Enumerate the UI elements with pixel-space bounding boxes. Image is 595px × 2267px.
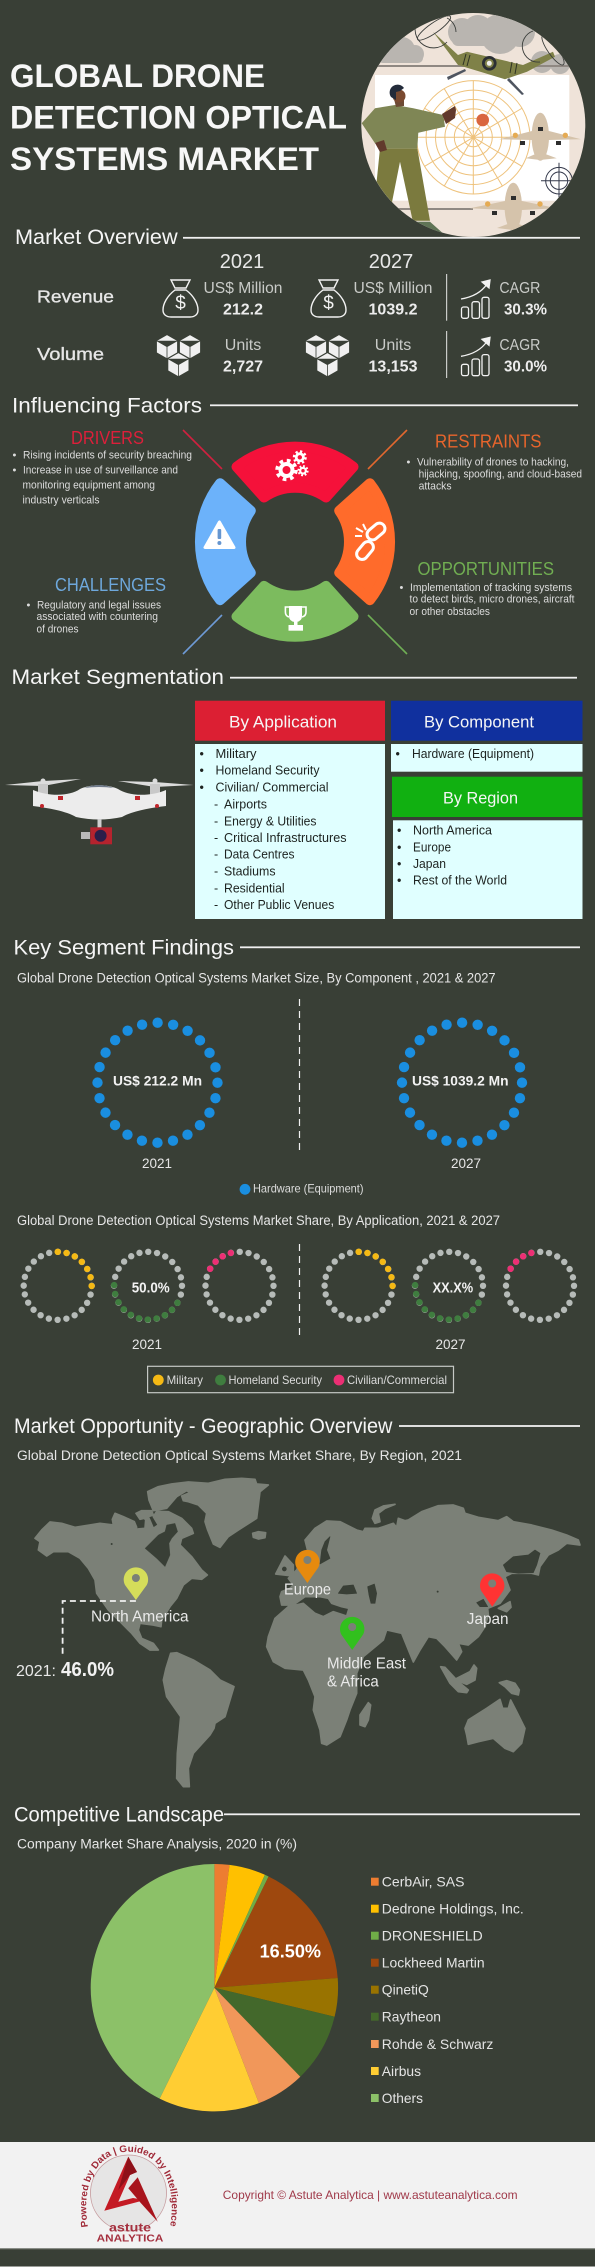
volume values: 13,153 <box>369 359 418 376</box>
row labels: Volume <box>37 344 104 364</box>
pin: middle east and africa <box>340 1617 364 1650</box>
crosshair <box>541 162 572 198</box>
list: - <box>214 848 218 862</box>
year labels: 2027 <box>451 1156 481 1171</box>
icon: gears <box>277 452 308 480</box>
legend: Military <box>167 1373 203 1387</box>
list: • <box>396 747 400 761</box>
row labels: Revenue <box>37 287 114 307</box>
logo: astute analytica: astute <box>109 2221 151 2235</box>
ring values: 50.0% <box>132 1280 170 1296</box>
icon: money bag 2027 <box>311 280 346 317</box>
year labels: 2021 <box>220 251 264 273</box>
footer band <box>0 2142 595 2250</box>
restraints text: hijacking, spoofing, and cloud-based <box>419 468 582 480</box>
list: • <box>397 857 401 871</box>
CAGR values: 30.3% <box>504 302 547 318</box>
icon: warning <box>205 522 234 548</box>
drivers text: • <box>12 464 16 476</box>
heading: influencing factors: Influencing Factors <box>12 394 202 417</box>
drivers text: monitoring equipment among <box>22 479 155 491</box>
header <box>392 777 582 817</box>
header: By Component <box>424 712 534 731</box>
ring 2027 <box>402 1023 522 1143</box>
world map <box>35 1478 580 1787</box>
CAGR values: CAGR <box>499 280 540 297</box>
coloured share dots <box>58 1252 540 1320</box>
aircraft lower <box>470 183 557 231</box>
list: Other Public Venues <box>224 898 334 912</box>
opportunities text: to detect birds, micro drones, aircraft <box>410 594 574 606</box>
list <box>195 744 385 919</box>
pie chart: company market share <box>91 1864 338 2111</box>
opportunities text: or other obstacles <box>410 606 490 618</box>
pie legend <box>371 1874 524 2106</box>
title: GLOBAL DRONE <box>10 58 265 94</box>
list: Civilian/ Commercial <box>216 781 328 795</box>
segment: challenges <box>200 483 251 600</box>
drivers text: DRIVERS <box>71 427 144 448</box>
panel: market overview table <box>37 251 547 378</box>
opportunities text: Implementation of tracking systems <box>410 582 572 594</box>
year labels <box>220 251 413 273</box>
header: By Region <box>443 788 518 807</box>
row labels <box>37 287 114 364</box>
restraints text: attacks <box>419 480 452 492</box>
ring 2027: US$ 1039.2 Mn <box>412 1072 508 1088</box>
pie chart: company market share: 16.50% <box>260 1941 321 1961</box>
connector lines <box>183 430 407 654</box>
pie legend: DRONESHIELD <box>382 1928 483 1944</box>
region labels: Japan <box>467 1611 508 1628</box>
subtitle: market share by application: Global Drone Detection Optical Systems Market Share, By Application, 2021 & 2027 <box>17 1213 500 1228</box>
region labels: North America <box>91 1609 189 1626</box>
year labels: 2021 <box>142 1156 172 1171</box>
challenges text: CHALLENGES <box>55 574 166 595</box>
legend <box>148 1366 454 1393</box>
list: Military <box>216 747 257 761</box>
legend: Hardware (Equipment) <box>253 1182 364 1196</box>
pie legend: CerbAir, SAS <box>382 1874 464 1890</box>
logo: astute analytica: ANALYTICA <box>97 2233 164 2245</box>
pie legend: QinetiQ <box>382 1982 429 1998</box>
header <box>195 701 385 741</box>
ring 2021 <box>98 1023 218 1143</box>
legend: Homeland Security <box>228 1373 322 1387</box>
region labels: Middle East <box>327 1655 407 1672</box>
list: Data Centres <box>224 848 294 862</box>
icon: growth chart revenue <box>461 280 490 318</box>
drivers text <box>12 427 192 506</box>
revenue values: 212.2 <box>223 301 263 318</box>
restraints text: Vulnerability of drones to hacking, <box>417 456 569 468</box>
legend: Civilian/Commercial <box>347 1373 447 1387</box>
heading: geographic overview: Market Opportunity - Geographic Overview <box>14 1415 393 1438</box>
pie legend: Lockheed Martin <box>382 1955 485 1971</box>
aircraft upper <box>499 113 581 161</box>
list: Japan <box>413 857 446 871</box>
heading: key segment findings: Key Segment Findings <box>14 936 234 959</box>
volume values: 2,727 <box>223 359 263 376</box>
drivers text: Rising incidents of security breaching <box>23 449 192 461</box>
list: • <box>397 824 401 838</box>
region labels: Europe <box>284 1581 331 1598</box>
list: Residential <box>224 881 285 895</box>
volume values: Units <box>225 337 261 354</box>
pie legend: Airbus <box>382 2063 421 2079</box>
opportunities text: • <box>400 582 404 594</box>
panel: by component <box>391 701 582 772</box>
revenue values: US$ Million <box>204 280 282 297</box>
list: • <box>200 764 204 778</box>
americas north and greenland <box>35 1478 268 1650</box>
illustration: operator at radar with drone and aircraft <box>361 12 585 237</box>
restraints text: RESTRAINTS <box>435 431 542 452</box>
drivers text: industry verticals <box>22 494 100 506</box>
year labels <box>142 1156 481 1171</box>
drivers text: • <box>12 449 16 461</box>
ring 2021: US$ 212.2 Mn <box>113 1072 202 1088</box>
title <box>10 58 347 177</box>
chart: application share rings <box>24 1244 574 1393</box>
year labels <box>132 1337 466 1352</box>
callout: north america share: 46.0% <box>61 1659 114 1681</box>
pie legend: Rohde & Schwarz <box>382 2036 493 2052</box>
list <box>393 820 582 919</box>
copyright: Copyright © Astute Analytica | www.astuteanalytica.com <box>223 2188 518 2202</box>
list: - <box>214 865 218 879</box>
icon: broken chain link <box>354 521 387 562</box>
volume values: Units <box>375 337 411 354</box>
region labels: & Africa <box>327 1674 379 1691</box>
logo: astute analytica: Powered by Data | Guided by Intelligence <box>80 2145 178 2228</box>
list: - <box>214 881 218 895</box>
pie legend: Others <box>382 2090 423 2106</box>
list: Hardware (Equipment) <box>412 747 534 761</box>
opportunities text <box>400 558 574 618</box>
subtitle: share by region: Global Drone Detection Optical Systems Market Share, By Region, 2021 <box>17 1448 462 1463</box>
pin: japan <box>480 1573 504 1607</box>
restraints text <box>406 431 582 492</box>
CAGR values <box>499 280 547 376</box>
CAGR values: CAGR <box>499 337 540 354</box>
list: • <box>397 874 401 888</box>
list <box>391 744 582 772</box>
challenges text: • <box>26 599 30 611</box>
region labels <box>91 1581 508 1691</box>
list: - <box>214 797 218 811</box>
eurasia and africa <box>267 1504 580 1745</box>
revenue values: 1039.2 <box>369 301 418 318</box>
icon: cubes 2027 <box>306 335 350 377</box>
list: Homeland Security <box>216 764 320 778</box>
operator <box>362 85 456 236</box>
segment: opportunities <box>236 586 354 637</box>
icon: money bag 2027: $ <box>323 293 334 314</box>
header: By Application <box>229 712 337 731</box>
icon: money bag 2021: $ <box>175 293 186 314</box>
surveillance drone <box>415 12 567 95</box>
ring values: XX.X% <box>433 1280 473 1296</box>
callout: north america share <box>16 1601 136 1681</box>
list: - <box>214 831 218 845</box>
pie legend: Raytheon <box>382 2009 441 2025</box>
list: Stadiums <box>224 865 276 879</box>
list: • <box>397 840 401 854</box>
segment: drivers <box>236 447 354 498</box>
revenue values: US$ Million <box>354 280 432 297</box>
list: Airports <box>224 797 267 811</box>
challenges text: of drones <box>36 623 79 635</box>
title: SYSTEMS MARKET <box>10 141 319 177</box>
pie legend: Dedrone Holdings, Inc. <box>382 1901 524 1917</box>
panel: influencing factors ring <box>12 427 582 654</box>
segment: restraints <box>339 483 390 600</box>
list: • <box>200 747 204 761</box>
icon: cubes 2021 <box>156 335 200 377</box>
icon: white quadcopter with red camera <box>5 778 194 844</box>
list: North America <box>413 824 492 838</box>
list: Critical Infrastructures <box>224 831 346 845</box>
subtitle: market size by component: Global Drone Detection Optical Systems Market Size, By Component , 2021 & 2027 <box>17 971 496 986</box>
ring values <box>132 1280 473 1296</box>
heading: competitive landscape: Competitive Landscape <box>14 1804 224 1827</box>
restraints text: • <box>406 456 410 468</box>
challenges text: Regulatory and legal issues <box>37 599 161 611</box>
pin: europe <box>295 1550 320 1583</box>
opportunities text: OPPORTUNITIES <box>418 558 554 579</box>
icon: growth chart volume <box>461 337 490 376</box>
list: Energy & Utilities <box>224 814 316 828</box>
title: DETECTION OPTICAL <box>10 100 347 136</box>
south america and southern islands <box>163 1653 525 1787</box>
subtitle: company share: Company Market Share Analysis, 2020 in (%) <box>17 1836 297 1851</box>
drivers text: Increase in use of surveillance and <box>23 464 178 476</box>
year labels: 2027 <box>435 1337 466 1352</box>
pin: north america <box>124 1567 148 1600</box>
panel: by application <box>195 701 385 919</box>
icon: trophy <box>285 606 306 631</box>
year labels: 2021 <box>132 1337 162 1352</box>
CAGR values: 30.0% <box>504 359 547 376</box>
heading: market segmentation: Market Segmentation <box>12 666 224 689</box>
revenue values <box>204 280 432 318</box>
heading: market overview: Market Overview <box>15 226 178 249</box>
year labels: 2027 <box>369 251 413 273</box>
list: Rest of the World <box>413 874 507 888</box>
list: - <box>214 898 218 912</box>
challenges text <box>26 574 166 635</box>
icon: money bag 2021 <box>163 280 198 317</box>
callout: north america share: 2021: <box>16 1663 56 1680</box>
list: - <box>214 814 218 828</box>
header <box>391 701 582 741</box>
challenges text: associated with countering <box>36 611 158 623</box>
list: • <box>200 781 204 795</box>
list: Europe <box>413 840 451 854</box>
volume values <box>223 337 418 376</box>
chart: component market size rings <box>98 999 522 1196</box>
panel: by region <box>392 777 582 919</box>
